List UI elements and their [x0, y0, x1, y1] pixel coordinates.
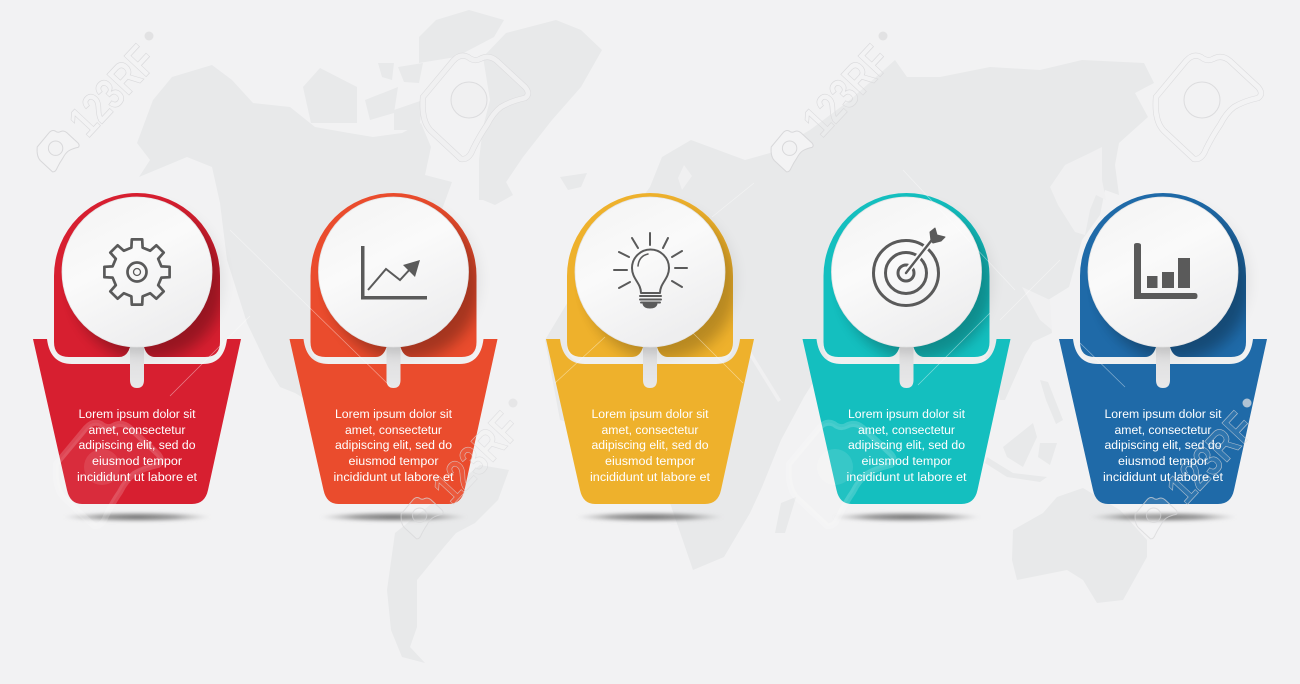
watermark wordmark on blue card	[1135, 398, 1264, 539]
card 5 text: Lorem ipsum dolor sit	[1104, 407, 1222, 421]
card 4 text: incididunt ut labore et	[846, 470, 967, 484]
card 1 text: adipiscing elit, sed do	[78, 438, 196, 452]
card 2 text: eiusmod tempor	[348, 454, 438, 468]
card 3 text: incididunt ut labore et	[590, 470, 711, 484]
icon: line chart with arrow	[361, 246, 427, 300]
watermark logo on teal card	[789, 423, 894, 526]
card 3 shapes	[546, 193, 754, 522]
card 4 text	[846, 407, 967, 484]
card 1 text: Lorem ipsum dolor sit	[78, 407, 196, 421]
card 5 text: eiusmod tempor	[1118, 454, 1208, 468]
card 5 text	[1103, 407, 1224, 484]
watermark logo top right	[1156, 56, 1261, 159]
inland seas	[678, 147, 1106, 402]
card 5: blue bars	[1059, 193, 1267, 522]
card 1 text	[77, 407, 198, 484]
watermark wordmark top middle: 123RF	[793, 36, 900, 146]
card 2 text: amet, consectetur	[345, 423, 442, 437]
card 4 text: adipiscing elit, sed do	[848, 438, 965, 452]
card 1 shapes	[33, 193, 241, 522]
icon: light bulb	[614, 233, 687, 308]
card 4: teal target	[802, 193, 1010, 522]
card 3 text: Lorem ipsum dolor sit	[592, 407, 709, 421]
card 4 text: eiusmod tempor	[862, 454, 952, 468]
card 5 text: adipiscing elit, sed do	[1104, 438, 1222, 452]
card 3 text: amet, consectetur	[602, 423, 698, 437]
world map backdrop	[137, 10, 1154, 663]
card 5 text: amet, consectetur	[1114, 423, 1212, 437]
watermark wordmark near orange card: 123RF	[423, 403, 530, 513]
card 2 text: Lorem ipsum dolor sit	[335, 407, 453, 421]
card 1: red gear	[33, 193, 241, 522]
icon: gear	[104, 239, 170, 305]
card 1 text: eiusmod tempor	[92, 454, 182, 468]
watermark wordmark on blue card: 123RF	[1157, 403, 1264, 513]
watermark logo top centre-left	[423, 56, 528, 159]
card 5 shapes	[1059, 193, 1267, 522]
card 2 text: adipiscing elit, sed do	[335, 438, 452, 452]
watermark wordmark top left: 123RF	[59, 36, 166, 146]
card 2 text: incididunt ut labore et	[334, 470, 454, 484]
watermark wordmark top middle	[771, 32, 900, 172]
watermark overlays on cards	[56, 398, 1264, 539]
watermark logo on red card	[56, 423, 161, 526]
watermark outlines behind cards	[37, 32, 1261, 172]
card 3 text	[590, 407, 711, 484]
card 1 text: incididunt ut labore et	[77, 470, 198, 484]
card 2 text	[334, 407, 454, 484]
card 3 text: adipiscing elit, sed do	[592, 438, 709, 452]
card 2: orange chart	[290, 193, 498, 522]
watermark wordmark near orange card	[401, 398, 530, 539]
card 2 shapes	[290, 193, 498, 522]
card 4 text: Lorem ipsum dolor sit	[848, 407, 966, 421]
icon: bar chart	[1134, 243, 1198, 299]
card 3: yellow bulb	[546, 193, 754, 522]
watermark wordmark top left	[37, 32, 166, 172]
card 3 text: eiusmod tempor	[605, 454, 695, 468]
icon: target with arrow	[874, 228, 945, 306]
card 4 text: amet, consectetur	[858, 423, 955, 437]
card 5 text: incididunt ut labore et	[1103, 470, 1224, 484]
card 4 shapes	[802, 193, 1010, 522]
card 1 text: amet, consectetur	[88, 423, 186, 437]
